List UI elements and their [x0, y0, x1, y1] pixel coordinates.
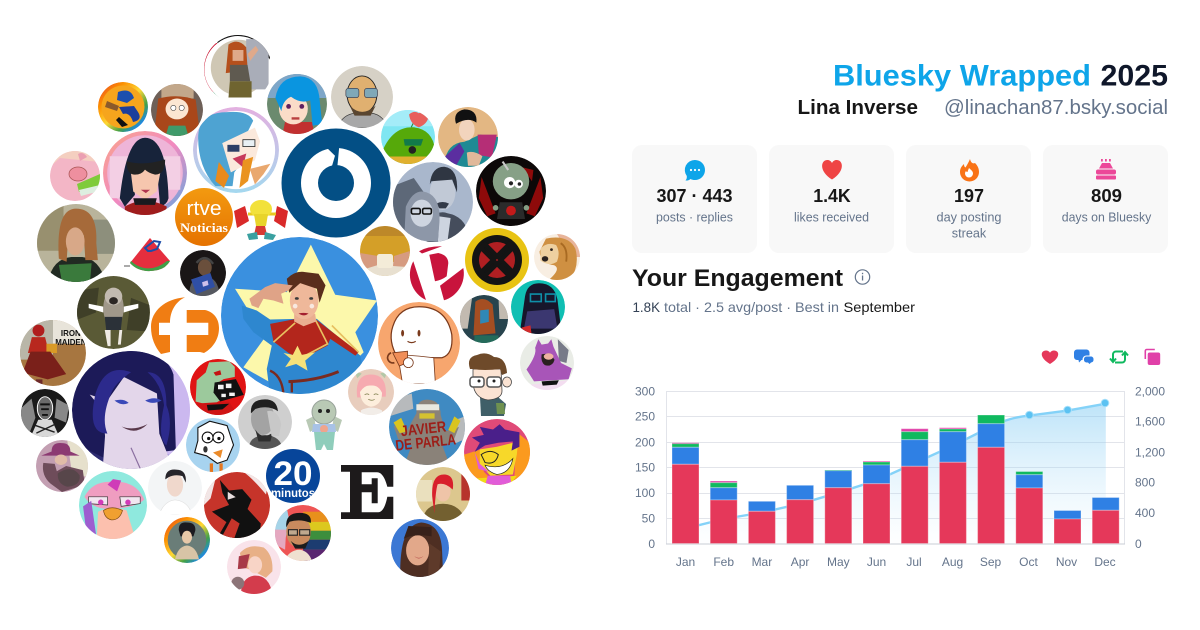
display name: Lina Inverse	[798, 97, 918, 119]
icon: likes legend	[1042, 350, 1058, 364]
avatar: pale man sketch	[148, 461, 202, 515]
cumulative line	[686, 404, 1106, 528]
avatar: 20 minutos logo: 20	[274, 455, 312, 493]
bar: Aug	[939, 428, 966, 544]
month labels: Sep	[980, 555, 1001, 569]
panel: avatar bubble cluster	[20, 28, 580, 594]
stat value: 307 · 443	[656, 185, 732, 206]
bar: Mar	[748, 501, 775, 544]
avatar: red-haired woman with flag ring	[204, 35, 270, 98]
avatar: 20 minutos logo	[266, 449, 320, 503]
month labels: Jul	[906, 555, 922, 569]
avatar: painted woman	[460, 295, 508, 343]
avatar: Iron Man doll Iron Maiden: IRON	[61, 329, 81, 338]
bar: Apr	[787, 485, 814, 544]
avatar: furby	[79, 471, 147, 539]
avatar: pink-haired woman drawing	[227, 540, 281, 594]
stat label: day posting	[936, 210, 1002, 224]
icon: Tweety with boxing gloves	[234, 200, 288, 240]
avatar: red P logo	[410, 246, 464, 300]
bar: Jul	[901, 429, 928, 544]
month labels: Jan	[676, 555, 695, 569]
avatar: green zombie	[476, 156, 546, 226]
right axis labels: 1,600	[1135, 414, 1165, 428]
month labels: Nov	[1056, 555, 1077, 569]
avatar: X-Men logo	[465, 228, 529, 292]
avatar: red-haired woman	[416, 467, 470, 521]
avatar: red Batman Beyond	[204, 472, 270, 538]
icon: chat bubble	[685, 160, 705, 181]
avatar: man with glasses and pride flag	[275, 505, 331, 561]
stat label: posts · replies	[656, 210, 733, 224]
month labels: Apr	[791, 555, 809, 569]
avatar: Darth Vader on teal	[511, 280, 565, 334]
left axis labels	[635, 384, 655, 551]
bar: Dec	[1092, 498, 1119, 544]
avatar: brunette with bangs	[391, 519, 449, 577]
left axis labels: 50	[642, 512, 655, 526]
month labels: Oct	[1019, 555, 1038, 569]
right axis labels: 400	[1135, 506, 1155, 520]
bar: Oct	[1016, 472, 1043, 544]
stat value: 197	[954, 185, 984, 206]
bar: May	[825, 470, 852, 544]
engagement summary	[632, 299, 915, 315]
avatar: pig	[50, 151, 100, 201]
avatar: pencil sketch couple	[393, 162, 473, 242]
avatar: masked heroine	[103, 131, 187, 215]
avatar: orange F speech-bubble logo	[151, 297, 219, 354]
icon: Cthulhu plush	[306, 400, 342, 450]
title: Bluesky Wrapped	[833, 60, 1091, 92]
stat label line 2: streak	[952, 226, 987, 240]
icon: watermelon with glasses	[124, 238, 170, 271]
left axis labels: 0	[648, 537, 655, 551]
bar: Sep	[978, 415, 1005, 544]
cumulative area	[686, 404, 1106, 544]
left axis labels: 250	[635, 410, 655, 424]
avatar: portrait with rainbow ring	[164, 517, 210, 563]
baseline	[666, 543, 1125, 545]
left axis labels: 300	[635, 384, 655, 398]
stat label: days on Bluesky	[1062, 210, 1152, 224]
chart grid	[666, 391, 1124, 544]
month labels: Feb	[713, 555, 734, 569]
bar: Nov	[1054, 510, 1081, 544]
avatar: orange mug doodle girl	[378, 302, 460, 384]
engagement summary: 1.8K	[632, 299, 661, 315]
icon: cartoon man with glasses	[469, 353, 512, 416]
panel: stat card posts	[632, 145, 757, 253]
right axis labels: 0	[1135, 537, 1142, 551]
month labels: Mar	[752, 555, 772, 569]
avatar: hands holding tea	[360, 226, 410, 276]
panel: header	[798, 60, 1168, 119]
icon: heart	[822, 160, 842, 180]
icon: flame	[960, 159, 979, 182]
avatar: El Español E logo	[341, 465, 393, 519]
engagement summary: September	[844, 299, 915, 315]
left axis labels: 100	[635, 486, 655, 500]
month labels: Dec	[1094, 555, 1116, 569]
avatar: purple Batman caricature	[520, 336, 574, 390]
avatar: man with headphones	[180, 250, 226, 296]
stat label: likes received	[794, 210, 869, 224]
avatar: Iron Man doll Iron Maiden: MAIDEN	[55, 338, 87, 347]
avatar: golden dog	[534, 234, 580, 280]
avatar: Iron Man doll Iron Maiden	[20, 320, 87, 386]
avatar: black and white engraving	[21, 389, 69, 437]
engagement summary: total · 2.5 avg/post · Best in	[664, 299, 839, 315]
avatar: Javier de Parla mummy: JAVIER	[400, 419, 447, 440]
avatar: drawn person on tan	[438, 107, 498, 167]
avatar: blue-haired anime	[267, 74, 327, 137]
month labels: Jun	[867, 555, 886, 569]
title year: 2025	[1100, 60, 1168, 92]
avatar: rtve Noticias logo: Noticias	[180, 221, 228, 235]
avatar: Simpsons style purple hair	[464, 419, 530, 485]
handle: @linachan87.bsky.social	[944, 97, 1168, 119]
avatar: blue-haired saint with ring	[193, 107, 279, 193]
chart legend icons	[1042, 350, 1160, 365]
avatar: rtve Noticias logo: rtve	[186, 198, 222, 220]
avatar: bald man with blue glasses	[331, 66, 393, 128]
stat value: 809	[1091, 185, 1122, 206]
bar: Jan	[672, 443, 699, 544]
right axis labels: 800	[1135, 476, 1155, 490]
left axis labels: 150	[635, 460, 655, 474]
avatar: Captain Marvel salute main profile	[221, 237, 378, 396]
avatar: Wendy cartoon	[151, 84, 203, 136]
icon: replies legend	[1074, 350, 1094, 364]
avatar: rtve Noticias logo	[175, 188, 233, 246]
left axis labels: 200	[635, 436, 655, 450]
avatar: woman with hat	[36, 440, 88, 492]
avatar: Javier de Parla mummy: DE PARLA	[395, 431, 457, 455]
bars	[672, 415, 1119, 544]
month labels: May	[827, 555, 850, 569]
avatar: white doodle dog	[186, 418, 240, 472]
avatar: Anya pink hair	[348, 369, 394, 415]
avatar: dark blue ring logo	[282, 128, 390, 238]
stacked bar and line chart	[635, 384, 1165, 569]
month labels	[676, 555, 1116, 569]
heading: Your Engagement: Your Engagement	[632, 265, 843, 292]
avatar: Javier de Parla mummy	[389, 389, 465, 465]
bar: Jun	[863, 461, 890, 544]
icon: info	[855, 270, 870, 284]
avatar: purple-haired portrait	[72, 351, 190, 471]
avatar: grey man hand over eye	[238, 395, 292, 449]
panel: stat card likes	[769, 145, 894, 253]
right axis labels: 2,000	[1135, 384, 1165, 398]
icon: quotes legend	[1145, 350, 1160, 365]
cumulative points	[1026, 399, 1109, 419]
stat value: 1.4K	[813, 185, 851, 206]
avatar: pug on camo	[77, 276, 150, 349]
right axis labels	[1135, 384, 1165, 551]
icon: reposts legend	[1110, 352, 1128, 362]
bar: Feb	[710, 481, 737, 544]
month labels: Aug	[942, 555, 963, 569]
avatar: long-haired rocker	[37, 204, 115, 282]
panel: stat card days	[1043, 145, 1168, 253]
avatar: green hill with glasses	[381, 110, 435, 164]
icon: cake	[1096, 159, 1116, 180]
avatar: blue cartoon with rainbow ring	[98, 82, 148, 132]
avatar: 20 minutos logo: minutos	[271, 488, 315, 500]
right axis labels: 1,200	[1135, 446, 1165, 460]
avatar: pixel dinosaur	[190, 359, 246, 415]
panel: stat card streak	[906, 145, 1031, 253]
